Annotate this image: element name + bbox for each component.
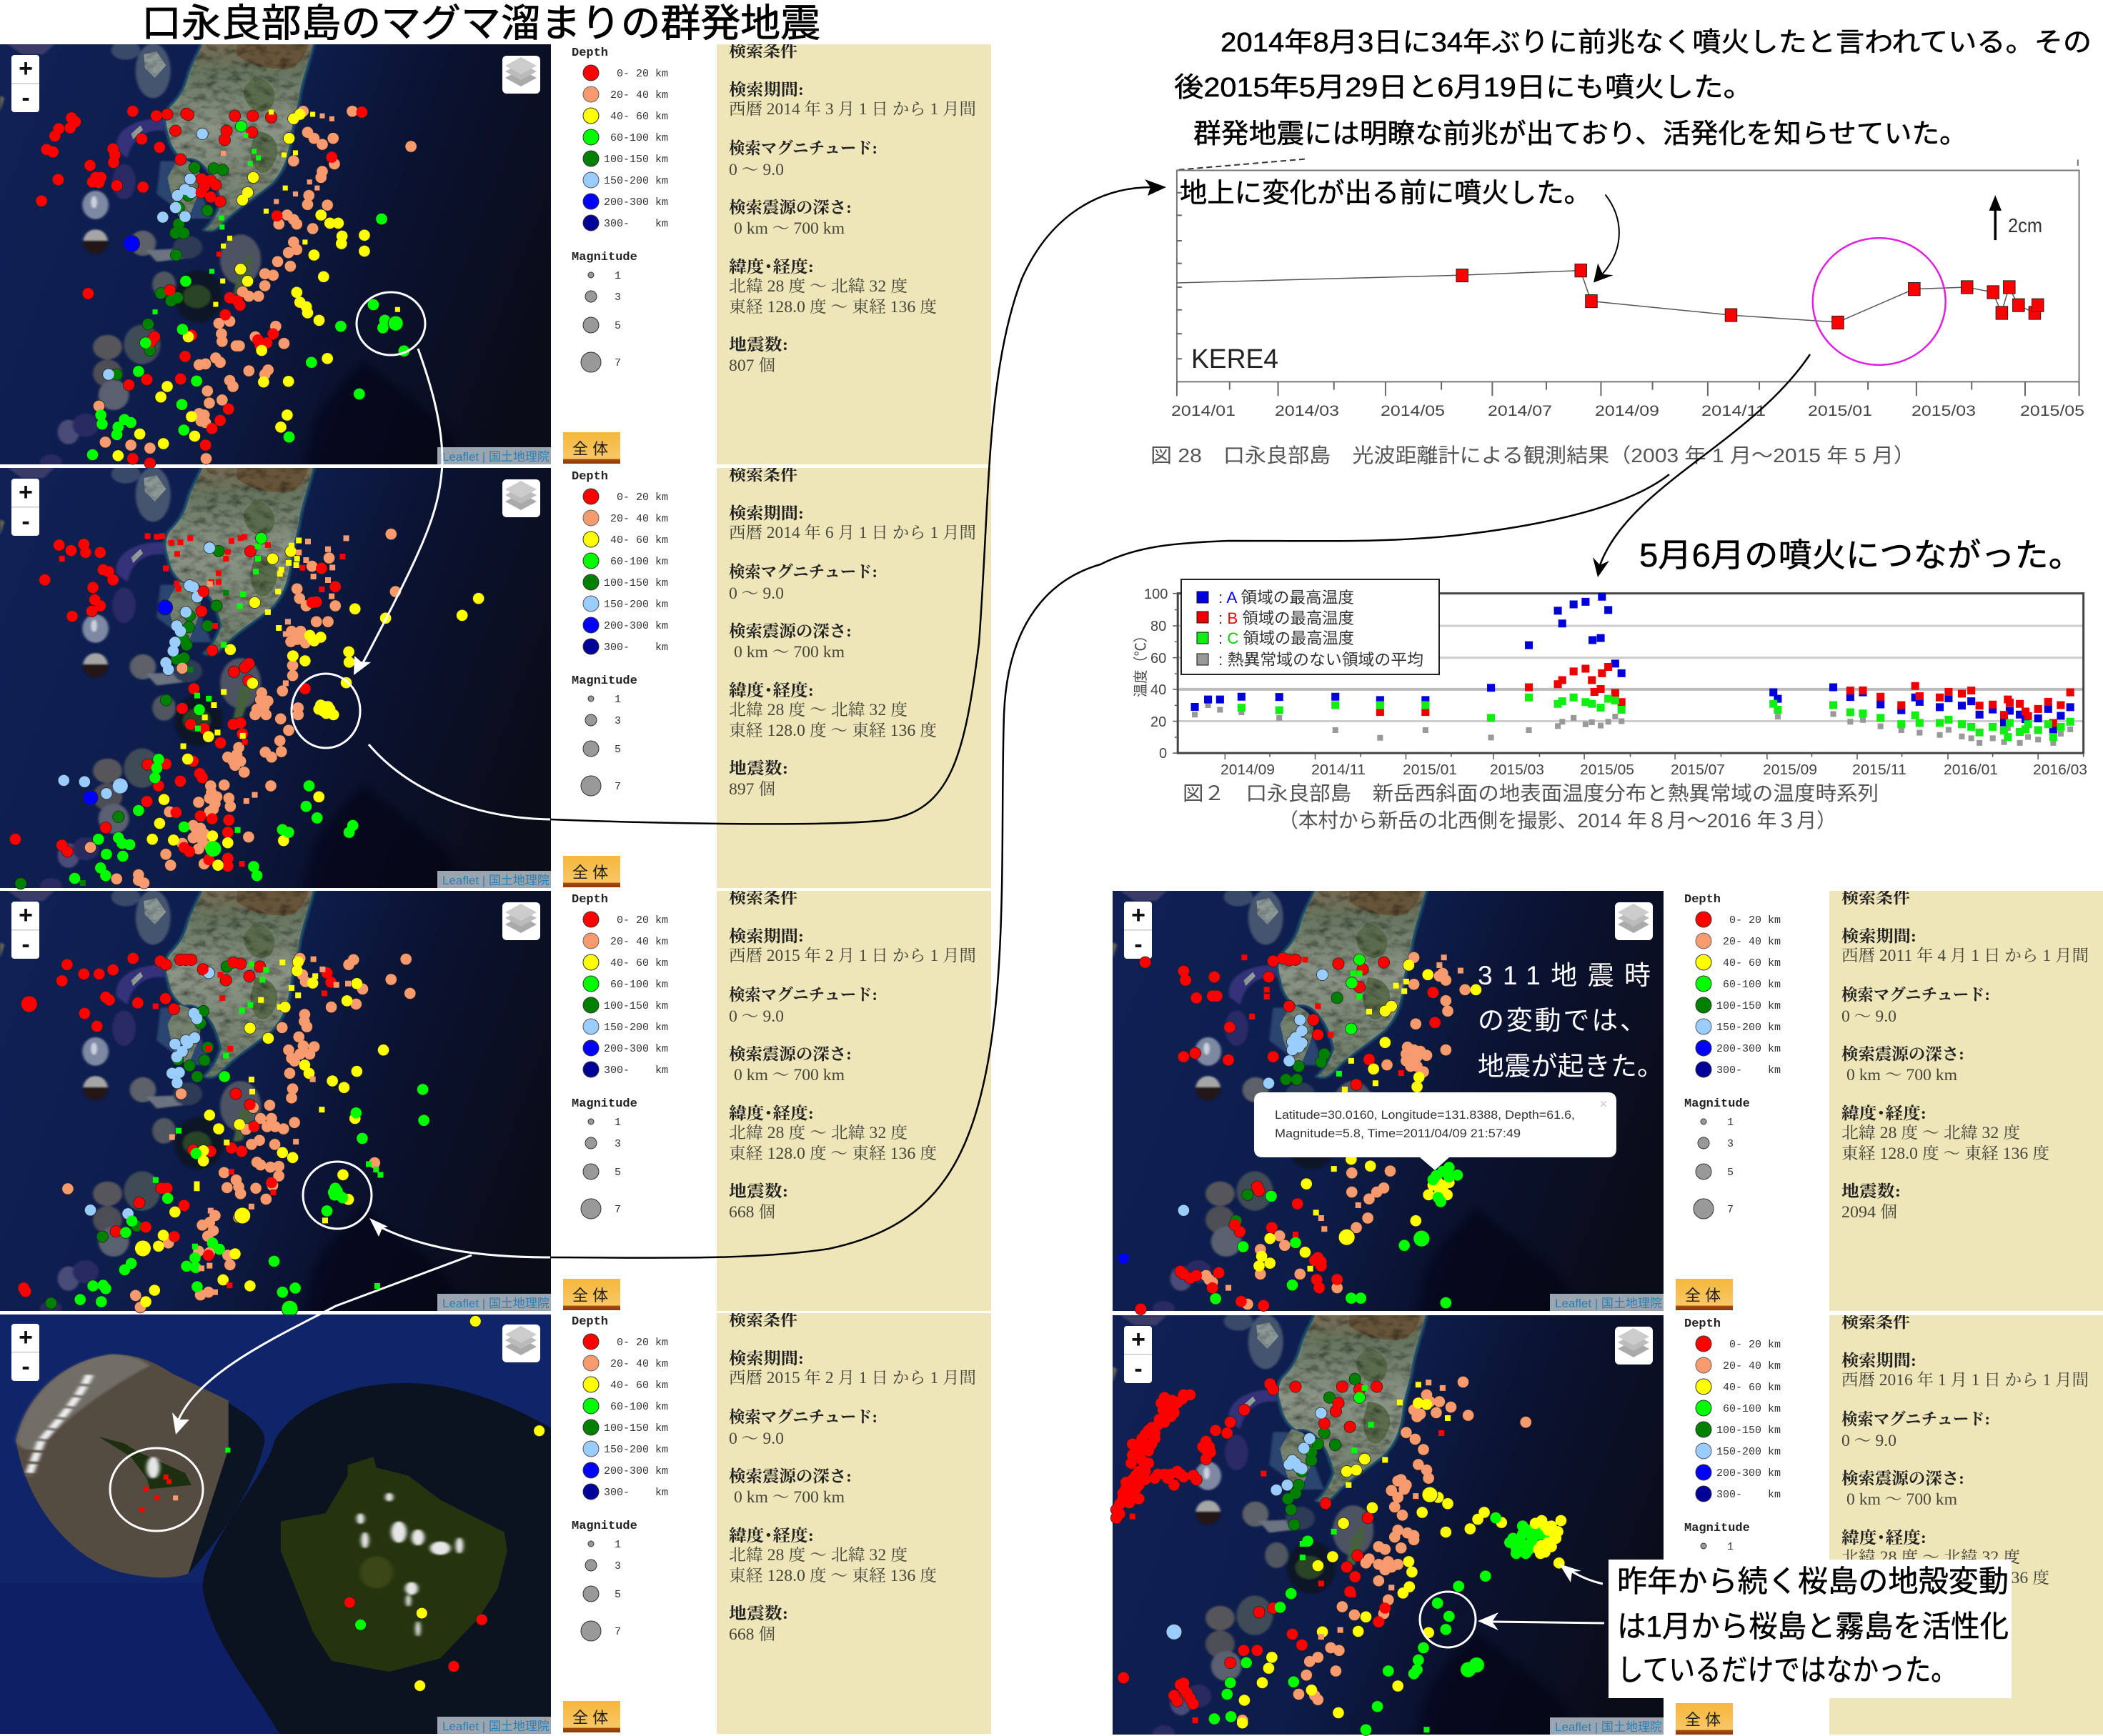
chart: KERE4 distance measurement: 2015/01 [1808,403,1872,419]
chart legend: : C 領域の最高温度 [1218,629,1354,647]
legend: 300- km [604,642,668,654]
search conditions: 検索マグニチュード: [1841,986,1990,1004]
zoom control: + [19,55,33,82]
callout box: は1月から桜島と霧島を活性化 [1617,1610,2009,1643]
legend [572,470,668,796]
search conditions: 検索条件 [729,1311,797,1329]
search conditions: 0 km 〜 700 km [1846,1490,1957,1508]
layer button [502,56,540,94]
chart: surface temperature time series: 80 [1150,619,1166,634]
chart: surface temperature time series: 2015/11 [1852,762,1906,778]
search conditions: 検索震源の深さ: [729,1045,852,1063]
legend: 40- 60 km [1723,1382,1781,1394]
search conditions: 緯度･経度: [729,682,814,699]
legend: 20- 40 km [1723,936,1781,948]
chart: surface temperature time series: 0 [1159,746,1167,762]
zoom control: - [21,84,30,111]
search conditions: 0 km 〜 700 km [734,219,845,237]
legend: 200-300 km [604,1043,668,1055]
legend: 300- km [1716,1489,1781,1501]
arrow: KERE4 circle to temperature chart [1593,354,1810,577]
legend: 200-300 km [604,620,668,632]
legend: 200-300 km [604,1465,668,1477]
legend: 100-150 km [1716,1000,1781,1012]
search conditions [1829,1313,2103,1735]
search conditions: 北緯 28 度 〜 北緯 32 度 [729,701,908,719]
panel: map 2014-03 [0,41,991,479]
legend: 150-200 km [1716,1446,1781,1458]
search conditions: 地震数: [729,336,788,354]
callout box: しているだけではなかった。 [1617,1653,1957,1687]
search conditions: 検索期間: [729,504,804,522]
legend: Depth [572,470,608,484]
chart legend [1181,579,1439,674]
popup: × [1599,1097,1608,1112]
legend: 60-100 km [610,556,668,568]
legend: 40- 60 km [610,534,668,547]
panel: map 2015-02 [0,887,991,1325]
legend: Magnitude [572,1520,637,1533]
search conditions [717,1311,991,1734]
legend: 200-300 km [1716,1043,1781,1055]
chart legend: : 熱異常域のない領域の平均 [1218,651,1423,669]
button: 全 体 [1685,1287,1721,1305]
legend: 7 [615,781,621,793]
chart: surface temperature time series: 2014/09 [1220,762,1275,778]
search conditions: 検索震源の深さ: [729,622,852,640]
chart: surface temperature time series: 2016/01 [1944,762,1998,778]
zoom control [11,902,39,959]
search conditions: 2094 個 [1841,1203,1897,1221]
popup: Latitude=30.0160, Longitude=131.8388, Depth=61.6, [1275,1109,1575,1122]
button: 全 体 [572,1709,608,1727]
earthquake markers [15,534,479,884]
search conditions: 検索マグニチュード: [729,986,878,1004]
satellite map [0,468,551,888]
chart: KERE4 distance measurement: 2014/11 [1701,403,1766,419]
attribution: Leaflet | 国土地理院 [1555,1720,1662,1734]
legend [572,893,668,1219]
satellite map [1113,891,1664,1311]
search conditions: 北緯 28 度 〜 北緯 32 度 [729,1124,908,1142]
legend: 3 [615,1138,621,1150]
search conditions: 検索震源の深さ: [729,199,852,216]
legend: Magnitude [572,674,637,688]
search conditions: 0 km 〜 700 km [734,1488,845,1506]
legend: 100-150 km [604,154,668,166]
chart: surface temperature time series: 2015/05 [1580,762,1634,778]
chart: KERE4 distance measurement: KERE4 [1191,344,1278,374]
ring: map 2016-01 swarm [1420,1592,1476,1647]
search conditions: 東経 128.0 度 〜 東経 136 度 [729,1144,937,1162]
search conditions: 北緯 28 度 〜 北緯 32 度 [1841,1124,2020,1142]
arrow: map 2014-03 to 2014-06 [354,349,442,675]
legend: 20- 40 km [610,89,668,101]
chart legend: : B 領域の最高温度 [1218,609,1354,627]
panel: map 2016-01 [1113,1312,2103,1736]
search conditions: 東経 128.0 度 〜 東経 136 度 [1841,1569,2049,1587]
search conditions: 緯度･経度: [729,1104,814,1122]
legend [572,1315,668,1641]
legend: 20- 40 km [610,1358,668,1370]
chart: KERE4 distance measurement: 2cm [2008,214,2042,236]
annotation: 311 earthquake: の変動では、 [1478,1006,1646,1035]
zoom control: - [21,1353,30,1380]
legend: 100-150 km [604,577,668,589]
button [563,856,620,887]
chart: surface temperature time series: 2015/09 [1763,762,1817,778]
arrow: callout to Sakurajima cluster [1559,1564,1603,1584]
search conditions: 0 〜 9.0 [729,161,784,179]
button [563,1279,620,1310]
attribution: Leaflet | 国土地理院 [442,874,550,887]
layer button [502,479,540,517]
search conditions: 緯度･経度: [1841,1104,1926,1122]
legend: 5 [1727,1167,1734,1179]
caption: figure 2: 図２ 口永良部島 新岳西斜面の地表面温度分布と熱異常域の温度時系列 [1183,782,1879,804]
arrow: map 2015-02 to Kuchinoerabu ring [172,1255,472,1435]
zoom control: + [1131,1326,1145,1353]
ring: map 2014-06 swarm [292,674,360,748]
legend: 200-300 km [604,196,668,209]
search conditions: 検索条件 [729,889,797,907]
search conditions: 地震数: [729,1605,788,1622]
zoom control [11,479,39,536]
search conditions: 東経 128.0 度 〜 東経 136 度 [729,298,937,316]
annotation: 311 earthquake: 地震が起きた。 [1478,1052,1664,1081]
legend: 5 [615,320,621,332]
legend: 150-200 km [604,1022,668,1034]
panel: map 2011-04 [1113,887,2103,1325]
search conditions: 西暦 2015 年 2 月 1 日 から 1 月間 [729,1369,976,1387]
search conditions: 897 個 [729,780,775,798]
earthquake markers [41,111,411,463]
zoom control: + [1131,902,1145,929]
legend: Depth [1684,1317,1721,1331]
legend: 100-150 km [604,1422,668,1435]
legend: 3 [615,715,621,727]
legend: 1 [615,270,621,282]
legend: 1 [615,1539,621,1551]
chart: surface temperature time series: 2015/01 [1403,762,1457,778]
legend: 300- km [1716,1064,1781,1077]
ring: Kuchinoerabu island [110,1448,203,1531]
chart: KERE4 distance measurement: 2014/07 [1488,403,1552,419]
legend: Depth [572,1315,608,1329]
zoom control: - [21,931,30,958]
legend: 150-200 km [604,599,668,611]
button [1676,1279,1733,1310]
search conditions: 検索条件 [1841,889,1910,907]
search conditions: 北緯 28 度 〜 北緯 32 度 [729,277,908,295]
chart: KERE4 distance measurement: 地上に変化が出る前に噴火した。 [1180,179,1591,209]
button: 全 体 [572,1287,608,1305]
search conditions: 検索マグニチュード: [729,1408,878,1426]
search conditions: 0 km 〜 700 km [734,1066,845,1084]
search conditions: 緯度･経度: [729,258,814,276]
legend: 60-100 km [610,979,668,991]
search conditions [717,889,991,1311]
search conditions: 緯度･経度: [1841,1529,1926,1547]
legend: 40- 60 km [1723,957,1781,969]
earthquake markers [1123,957,1476,1309]
legend: 0- 20 km [1729,1339,1781,1351]
search conditions: 807 個 [729,356,775,374]
chart: surface temperature time series: 2016/03 [2033,762,2087,778]
layer button [1615,902,1653,940]
attribution: Leaflet | 国土地理院 [1555,1297,1662,1310]
legend: 5 [615,744,621,756]
chart: surface temperature time series: 100 [1144,587,1168,602]
legend: 1 [1727,1541,1734,1553]
legend: 20- 40 km [1723,1360,1781,1372]
earthquake markers [24,958,424,1309]
chart: surface temperature time series: 温度（℃） [1133,629,1149,697]
search conditions: 検索マグニチュード: [729,139,878,157]
button: 全 体 [572,440,608,458]
search conditions: 東経 128.0 度 〜 東経 136 度 [1841,1144,2049,1162]
legend: 5 [615,1167,621,1179]
intro text: 群発地震には明瞭な前兆が出ており、活発化を知らせていた。 [1193,119,1967,149]
annotation: 311 earthquake [1478,961,1664,1081]
legend: 40- 60 km [610,111,668,123]
search conditions: 0 km 〜 700 km [734,643,845,661]
legend: 0- 20 km [617,914,668,927]
search conditions: 北緯 28 度 〜 北緯 32 度 [1841,1548,2020,1566]
attribution: Leaflet | 国土地理院 [442,450,550,464]
search conditions: 検索マグニチュード: [1841,1410,1990,1428]
callout box: 昨年から続く桜島の地殻変動 [1617,1565,2009,1598]
legend: 0- 20 km [617,68,668,80]
search conditions: 0 〜 9.0 [729,1007,784,1025]
legend: 7 [615,1204,621,1216]
search conditions: 検索震源の深さ: [1841,1045,1964,1063]
caption: figure 2 [1183,782,1879,832]
legend: 0- 20 km [617,1337,668,1349]
legend: 7 [1727,1204,1734,1216]
button: 全 体 [572,864,608,882]
chart: surface temperature time series: 2015/03 [1490,762,1544,778]
search conditions: 西暦 2011 年 4 月 1 日 から 1 月間 [1841,947,2089,964]
search conditions: 検索条件 [729,466,797,484]
arrow: map 2014-06 to KERE4 chart [369,179,1166,824]
chart: KERE4 distance measurement: 2014/09 [1595,403,1659,419]
popup [1254,1092,1616,1170]
search conditions: 地震数: [729,759,788,777]
search conditions: 0 〜 9.0 [1841,1007,1896,1025]
legend: 20- 40 km [610,936,668,948]
legend: 150-200 km [604,1444,668,1456]
legend: 3 [615,1560,621,1572]
legend: 60-100 km [610,132,668,144]
legend: 0- 20 km [1729,914,1781,927]
satellite map [0,44,551,464]
legend: 20- 40 km [610,513,668,525]
zoom control: + [19,479,33,506]
legend: Magnitude [572,1097,637,1111]
satellite map [0,891,551,1311]
legend: Depth [572,46,608,60]
attribution: Leaflet | 国土地理院 [442,1297,550,1310]
zoom control [1124,1326,1152,1383]
search conditions: 検索条件 [1841,1313,1910,1331]
layer button [1615,1327,1653,1365]
chart: KERE4 distance measurement: 2014/03 [1275,403,1339,419]
search conditions: 西暦 2014 年 6 月 1 日 から 1 月間 [729,524,976,542]
chart: KERE4 distance measurement: 2015/05 [2020,403,2084,419]
legend [1684,893,1781,1219]
legend: Depth [1684,893,1721,907]
legend: 60-100 km [610,1401,668,1413]
chart: surface temperature time series: 20 [1150,714,1166,730]
earthquake markers [141,1321,540,1686]
zoom control: + [19,902,33,929]
caption: figure 28: 図 28 口永良部島 光波距離計による観測結果（2003 年 1 月〜2015 年 5 月） [1150,444,1915,467]
legend: 60-100 km [1723,1403,1781,1415]
chart: surface temperature time series [1133,579,2087,778]
search conditions: 検索条件 [729,42,797,60]
legend: 300- km [604,218,668,230]
search conditions: 検索期間: [729,1350,804,1367]
intro text: 後2015年5月29日と6月19日にも噴火した。 [1174,73,1753,103]
search conditions: 西暦 2016 年 1 月 1 日 から 1 月間 [1841,1371,2089,1389]
search conditions [717,42,991,464]
legend: 0- 20 km [617,492,668,504]
legend: 1 [615,1117,621,1129]
arrow: KERE4 circle to map 2015-02 [369,474,1669,1258]
legend: 300- km [604,1064,668,1077]
legend: 7 [615,357,621,369]
zoom control [11,1324,39,1381]
callout box [1609,1560,2012,1698]
legend: 100-150 km [1716,1425,1781,1437]
legend: Magnitude [572,251,637,264]
legend [572,46,668,372]
legend: 100-150 km [604,1000,668,1012]
ring: map 2015-02 swarm [303,1162,372,1229]
search conditions: 東経 128.0 度 〜 東経 136 度 [729,722,937,739]
search conditions: 検索震源の深さ: [1841,1470,1964,1487]
legend: 3 [615,291,621,304]
intro text [1174,28,2092,149]
ring: map 2014-03 swarm [357,292,425,355]
satellite map [0,1315,551,1734]
zoom control: - [1134,931,1143,958]
legend: 40- 60 km [610,957,668,969]
search conditions: 0 km 〜 700 km [1846,1066,1957,1084]
search conditions: 検索震源の深さ: [729,1467,852,1485]
chart: surface temperature time series: 2015/07 [1671,762,1725,778]
chart: surface temperature time series: 40 [1150,682,1166,698]
legend: 150-200 km [1716,1022,1781,1034]
search conditions: 検索期間: [1841,1352,1916,1370]
search conditions: 地震数: [729,1182,788,1200]
search conditions [717,466,991,888]
chart: KERE4 distance measurement: 2014/01 [1171,403,1236,419]
panel: map zoomed Kuchinoerabu and Yakushima [0,1311,991,1736]
button: 全 体 [1685,1711,1721,1729]
earthquake markers [1116,1379,1561,1730]
search conditions: 668 個 [729,1203,775,1221]
chart: KERE4 distance measurement [1171,159,2084,419]
zoom control: - [21,508,30,535]
search conditions: 東経 128.0 度 〜 東経 136 度 [729,1567,937,1585]
legend: 1 [1727,1117,1734,1129]
legend: Depth [572,893,608,907]
search conditions: 北緯 28 度 〜 北緯 32 度 [729,1546,908,1564]
search conditions [1829,889,2103,1311]
button [563,1701,620,1732]
zoom control: - [1134,1355,1143,1382]
layer button [502,902,540,940]
legend [1684,1317,1781,1553]
chart: surface temperature time series: 60 [1150,651,1166,667]
chart: KERE4 distance measurement: 2014/05 [1381,403,1445,419]
search conditions: 0 〜 9.0 [1841,1432,1896,1450]
zoom control: + [19,1324,33,1351]
search conditions: 地震数: [1841,1182,1901,1200]
chart: KERE4 distance measurement: 2015/03 [1911,403,1976,419]
button [1676,1703,1733,1735]
title: 口永良部島のマグマ溜まりの群発地震 [141,2,820,45]
popup: Magnitude=5.8, Time=2011/04/09 21:57:49 [1275,1127,1521,1140]
legend: Magnitude [1684,1097,1750,1111]
legend: 3 [1727,1138,1734,1150]
search conditions: 西暦 2015 年 2 月 1 日 から 1 月間 [729,947,976,964]
search conditions: 検索期間: [1841,927,1916,945]
zoom control [11,55,39,112]
satellite map [1113,1315,1664,1735]
annotation: May and June eruption: 5月6月の噴火につながった。 [1639,537,2082,574]
search conditions: 検索期間: [729,927,804,945]
layer button [502,1325,540,1362]
search conditions: 0 〜 9.0 [729,1430,784,1447]
legend: Magnitude [1684,1522,1750,1535]
legend: 7 [615,1626,621,1638]
search conditions: 緯度･経度: [729,1527,814,1545]
chart legend: : A 領域の最高温度 [1218,589,1354,607]
legend: 200-300 km [1716,1467,1781,1480]
annotation: 311 earthquake: 311地震時 [1478,961,1651,990]
legend: 150-200 km [604,175,668,187]
search conditions: 西暦 2014 年 3 月 1 日 から 1 月間 [729,100,976,118]
panel: map 2014-06 [0,464,991,902]
button [563,432,620,464]
search conditions: 668 個 [729,1625,775,1643]
legend: 5 [615,1589,621,1601]
legend: 1 [615,694,621,706]
chart: surface temperature time series: 2014/11 [1311,762,1366,778]
caption: figure 2: （本村から新岳の北西側を撮影、2014 年８月〜2016 年３月） [1278,809,1836,832]
legend: 300- km [604,1487,668,1499]
legend: 60-100 km [1723,979,1781,991]
arrow: callout to swarm ring [1478,1612,1604,1630]
intro text: 2014年8月3日に34年ぶりに前兆なく噴火したと言われている。その [1220,28,2092,58]
zoom control [1124,902,1152,959]
search conditions: 0 〜 9.0 [729,584,784,602]
search conditions: 検索マグニチュード: [729,563,878,581]
legend: 40- 60 km [610,1380,668,1392]
search conditions: 検索期間: [729,81,804,99]
attribution: Leaflet | 国土地理院 [442,1720,550,1733]
